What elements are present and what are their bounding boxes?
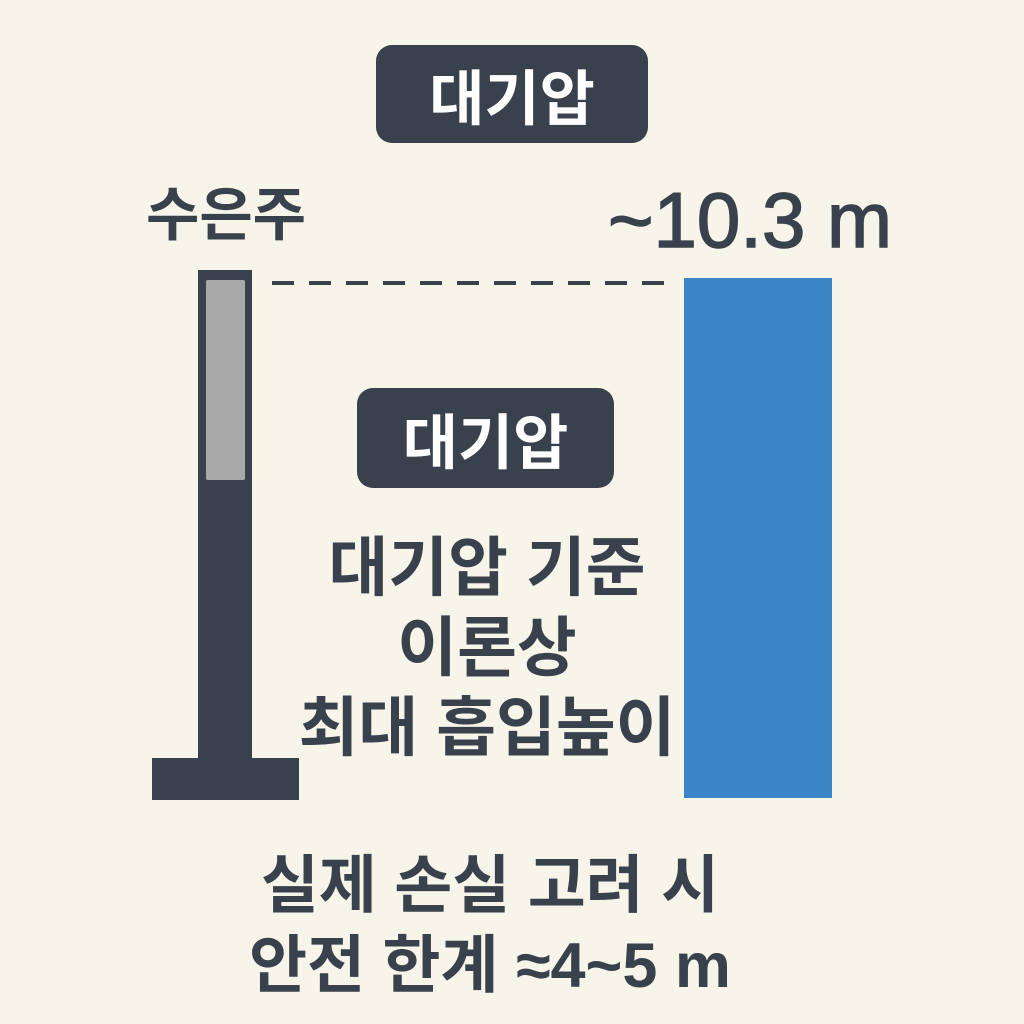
bottom note: 안전 한계 ≈4~5 m [249,931,731,1001]
mercury fill [206,280,245,480]
label: ~10.3 m: ~10.3 m [608,176,892,264]
dashed level line [272,281,664,285]
title pill: 대기압: 대기압 [429,66,595,132]
title pill: 대기압 [376,45,648,143]
description text: 이론상 [397,611,577,684]
column tube [198,270,252,760]
description text [299,531,675,764]
description text: 대기압 기준 [328,531,646,604]
description text: 최대 흡입높이 [299,691,675,764]
middle pill: 대기압 [357,388,614,488]
mercury column [152,270,299,800]
bottom note: 실제 손실 고려 시 [261,851,719,921]
column base [152,758,299,800]
water column bar [684,278,832,798]
middle pill: 대기압: 대기압 [403,410,568,476]
label: 수은주: 수은주 [146,183,306,248]
bottom note [249,851,731,1001]
